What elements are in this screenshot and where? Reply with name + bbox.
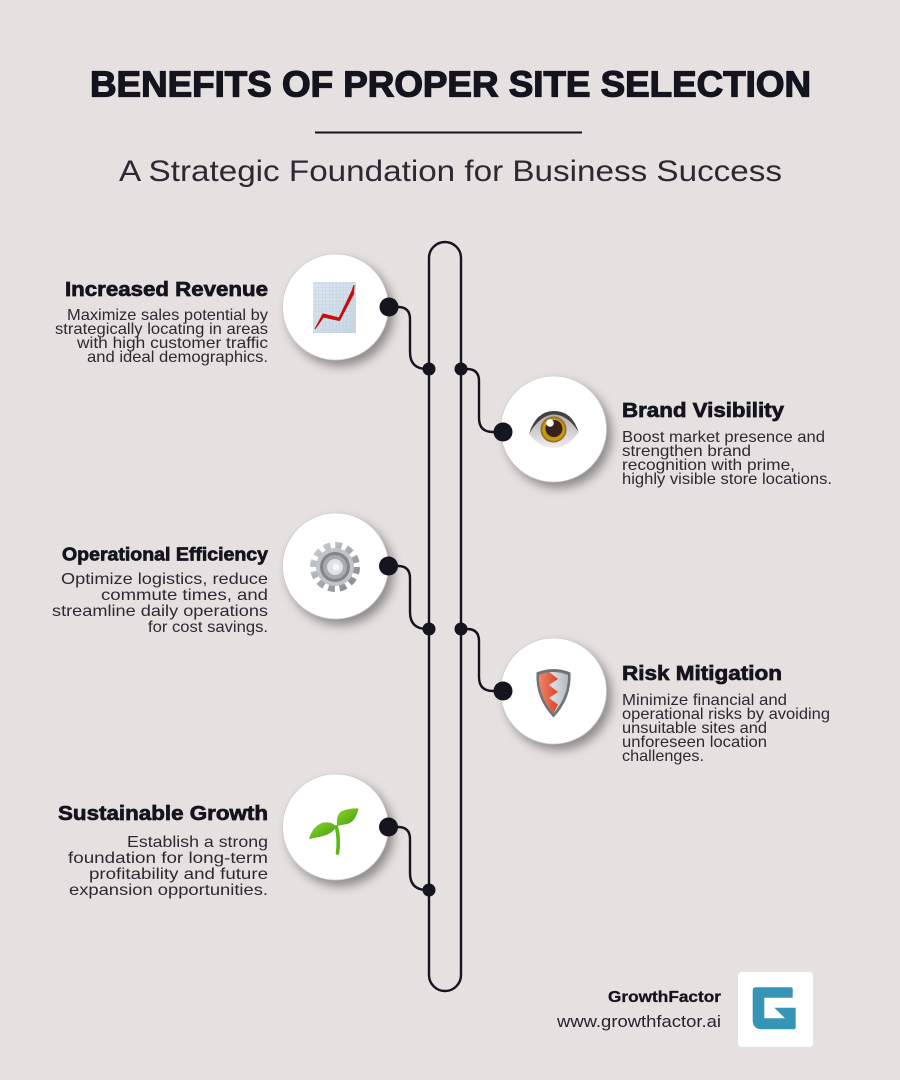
icon circle [282, 774, 388, 880]
icon: sprout [309, 808, 358, 853]
body text: profitability and future [89, 866, 268, 883]
body text: highly visible store locations. [622, 471, 832, 488]
body text: expansion opportunities. [69, 882, 268, 899]
body text: Boost market presence and [622, 429, 825, 446]
body text: and ideal demographics. [87, 349, 268, 366]
body text: Maximize sales potential by [67, 307, 268, 324]
body text: with high customer traffic [76, 335, 268, 352]
icon: eye [529, 411, 578, 448]
connector dot [494, 422, 512, 442]
track node [454, 622, 468, 636]
panel: Operational Efficiency [52, 513, 436, 636]
connector [461, 369, 503, 432]
body text: recognition with prime, [622, 457, 795, 474]
icon circle [500, 638, 606, 744]
panel: Sustainable Growth [58, 774, 436, 899]
title: BENEFITS OF PROPER SITE SELECTION [90, 64, 811, 104]
connector dot [379, 556, 398, 576]
connector [461, 629, 503, 691]
track node [422, 884, 436, 896]
body text [52, 571, 268, 636]
body text: Minimize financial and [622, 692, 787, 709]
icon: gear [314, 546, 356, 588]
icon: chart [313, 282, 356, 333]
icon circle [282, 513, 388, 619]
body text [622, 692, 830, 765]
footer brand name: GrowthFactor [608, 989, 721, 1006]
icon: shield [536, 669, 571, 718]
body text: Optimize logistics, reduce [61, 571, 268, 588]
panel: Increased Revenue [55, 254, 436, 376]
body text: Establish a strong [127, 834, 268, 851]
subtitle: A Strategic Foundation for Business Success [119, 155, 782, 188]
body text [68, 834, 268, 899]
body text: commute times, and [101, 587, 268, 604]
connector [389, 307, 429, 369]
body text: unsuitable sites and [622, 720, 767, 737]
panel: Risk Mitigation [454, 622, 830, 765]
heading: Operational Efficiency [62, 544, 269, 564]
heading: Brand Visibility [622, 400, 785, 422]
body text [622, 429, 832, 488]
connector dot [380, 298, 398, 316]
icon circle [282, 254, 388, 360]
body text: strategically locating in areas [55, 321, 268, 338]
body text: operational risks by avoiding [622, 706, 830, 723]
panel: Brand Visibility [454, 362, 832, 488]
footer website: www.growthfactor.ai [556, 1013, 721, 1031]
body text [55, 307, 268, 366]
heading: Increased Revenue [65, 279, 268, 301]
connector dot [494, 682, 512, 700]
heading: Risk Mitigation [622, 663, 782, 685]
logo [738, 972, 813, 1047]
timeline track [429, 242, 461, 991]
track node [422, 362, 436, 376]
track node [454, 362, 468, 376]
track node [422, 622, 436, 636]
body text: strengthen brand [622, 443, 751, 460]
body text: foundation for long-term [68, 850, 268, 867]
icon circle [500, 376, 606, 482]
body text: challenges. [622, 748, 704, 765]
connector [389, 566, 429, 629]
body text: streamline daily operations [52, 603, 268, 620]
connector [389, 827, 429, 890]
connector dot [379, 818, 398, 836]
body text: unforeseen location [622, 734, 767, 751]
body text: for cost savings. [148, 619, 268, 636]
heading: Sustainable Growth [58, 803, 268, 825]
